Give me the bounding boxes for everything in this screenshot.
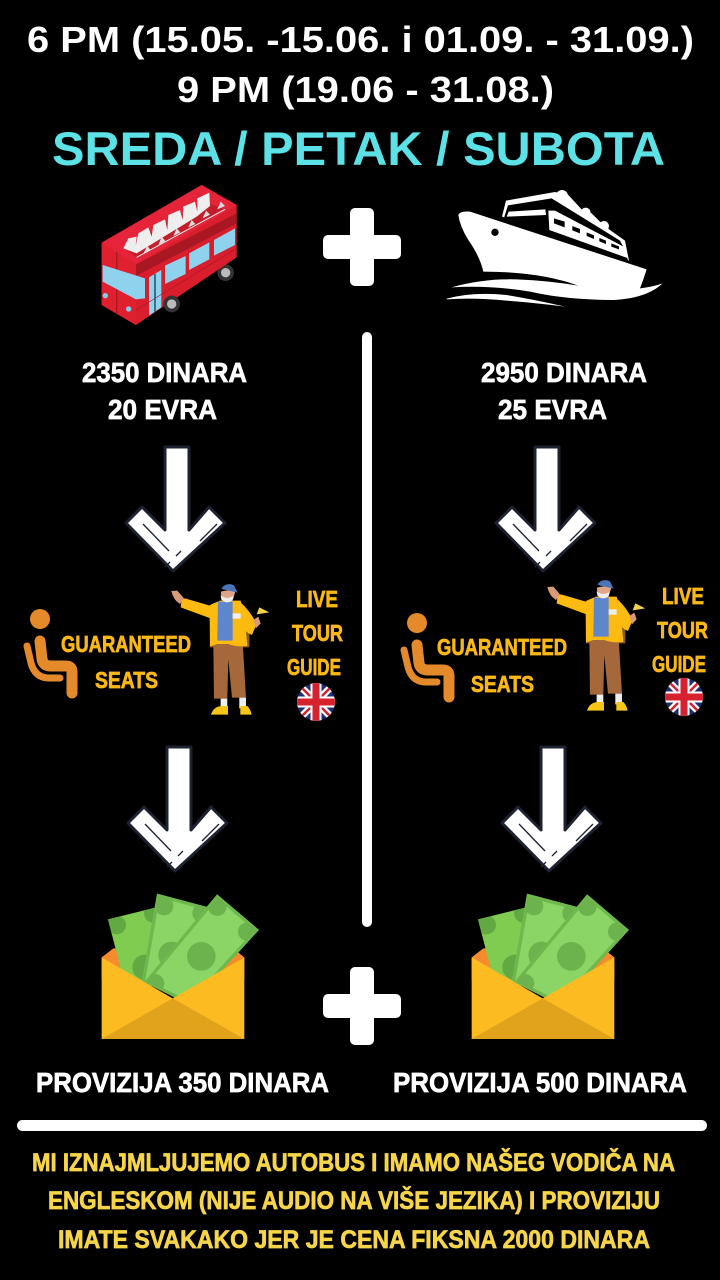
label: live tour guide: LIVE xyxy=(662,583,704,609)
arrow xyxy=(128,747,227,871)
label: guaranteed seats: GUARANTEED xyxy=(437,634,567,660)
icon: seat xyxy=(27,609,72,693)
label: guaranteed seats xyxy=(437,634,567,697)
footer note: IMATE SVAKAKO JER JE CENA FIKSNA 2000 DINARA xyxy=(58,1226,650,1254)
label: live tour guide xyxy=(652,583,708,677)
price: bus tour xyxy=(82,357,247,425)
illustration: tour guide xyxy=(547,580,645,711)
label: live tour guide: GUIDE xyxy=(287,654,341,680)
icon: red double-decker bus xyxy=(102,185,237,325)
price: bus tour: 20 EVRA xyxy=(108,394,217,425)
icon: UK flag xyxy=(665,678,703,716)
footer note xyxy=(32,1147,675,1254)
icon: money envelope xyxy=(102,896,257,1039)
label: guaranteed seats: SEATS xyxy=(471,671,534,697)
label: guaranteed seats xyxy=(61,631,191,693)
label: guaranteed seats: SEATS xyxy=(95,667,158,693)
footer note: ENGLESKOM (NIJE AUDIO NA VIŠE JEZIKA) I PROVIZIJU xyxy=(48,1185,660,1215)
price: bus and cruise: 2950 DINARA xyxy=(481,357,647,388)
price: bus and cruise: 25 EVRA xyxy=(498,394,607,425)
icon: white cruise ship xyxy=(447,190,663,307)
arrow xyxy=(126,447,225,571)
icon: seat xyxy=(404,613,449,697)
price: bus tour: 2350 DINARA xyxy=(82,357,247,388)
label: live tour guide xyxy=(287,586,343,680)
left column: bus tour xyxy=(27,357,343,1098)
label: live tour guide: TOUR xyxy=(292,620,343,646)
icon: UK flag xyxy=(297,683,335,721)
commission: bus tour: PROVIZIJA 350 DINARA xyxy=(36,1067,329,1098)
icon: money envelope xyxy=(472,896,627,1039)
title: schedule: 9 PM (19.06 - 31.08.) xyxy=(177,69,554,110)
arrow xyxy=(502,747,601,871)
commission: bus and cruise: PROVIZIJA 500 DINARA xyxy=(393,1067,687,1098)
title: schedule: 6 PM (15.05. -15.06. i 01.09. - 31.09.) xyxy=(27,19,694,60)
right column: bus and cruise xyxy=(393,357,708,1098)
title: schedule xyxy=(27,19,694,110)
vertical divider xyxy=(362,332,372,927)
arrow xyxy=(496,447,595,571)
label: live tour guide: TOUR xyxy=(657,617,708,643)
heading: days: SREDA / PETAK / SUBOTA xyxy=(52,122,665,175)
label: live tour guide: LIVE xyxy=(296,586,338,612)
price: bus and cruise xyxy=(481,357,647,425)
icon: plus bottom xyxy=(323,967,401,1045)
horizontal divider xyxy=(17,1120,707,1131)
label: guaranteed seats: GUARANTEED xyxy=(61,631,191,657)
icon: plus top xyxy=(323,208,401,286)
illustration: tour guide xyxy=(171,584,269,715)
